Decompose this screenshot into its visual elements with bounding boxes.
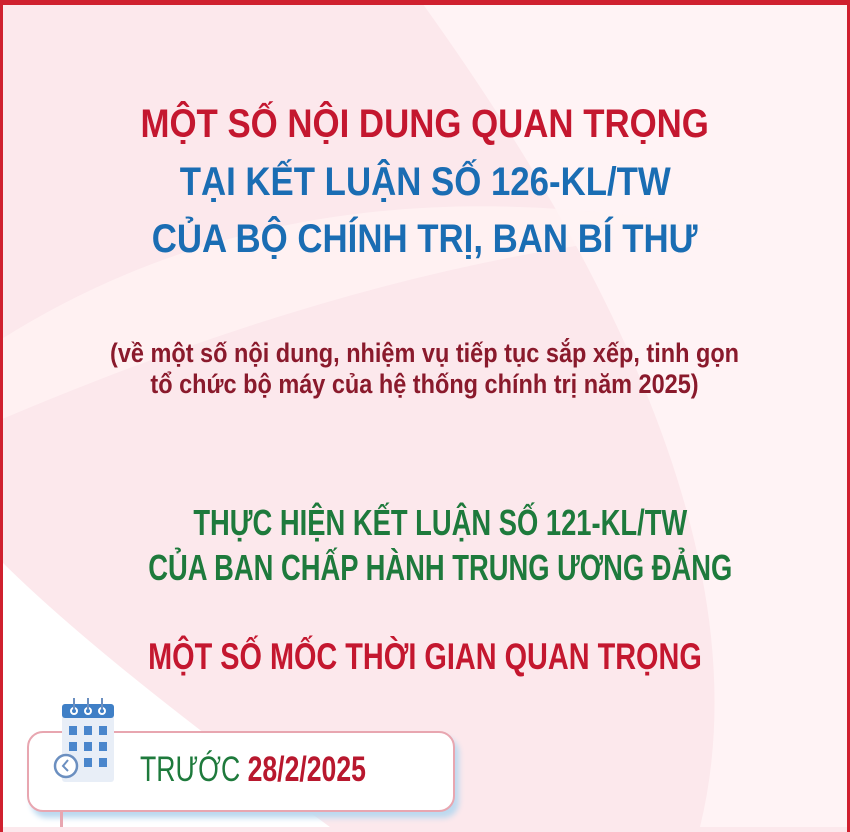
title (141, 101, 709, 261)
milestone box (27, 731, 455, 812)
title: CỦA BỘ CHÍNH TRỊ, BAN BÍ THƯ (152, 217, 698, 261)
green heading: CỦA BAN CHẤP HÀNH TRUNG ƯƠNG ĐẢNG (148, 547, 732, 588)
icon: calendar with clock (54, 698, 114, 782)
subtitle: tổ chức bộ máy của hệ thống chính trị năm 2025) (151, 369, 699, 399)
milestone text: TRƯỚC 28/2/2025 (140, 750, 366, 789)
green heading: THỰC HIỆN KẾT LUẬN SỐ 121-KL/TW (193, 502, 687, 543)
green heading (148, 502, 732, 588)
milestones heading: MỘT SỐ MỐC THỜI GIAN QUAN TRỌNG (148, 636, 702, 677)
title: MỘT SỐ NỘI DUNG QUAN TRỌNG (141, 102, 709, 146)
subtitle: (về một số nội dung, nhiệm vụ tiếp tục sắp xếp, tinh gọn (110, 338, 740, 368)
title: TẠI KẾT LUẬN SỐ 126-KL/TW (179, 160, 671, 204)
connector line (60, 810, 63, 827)
subtitle (110, 338, 740, 399)
